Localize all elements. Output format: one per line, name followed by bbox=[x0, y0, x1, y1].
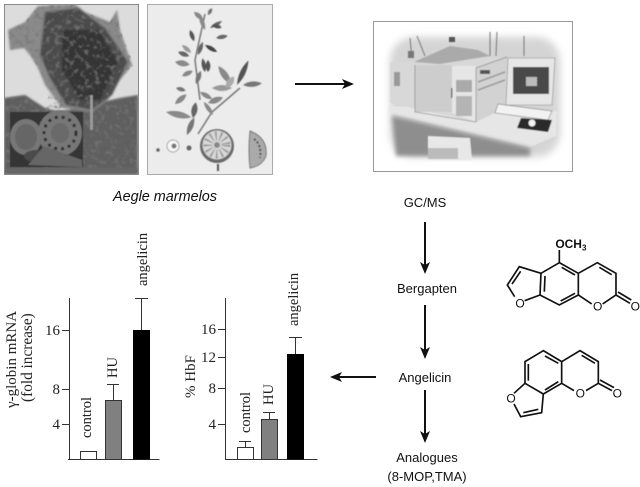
gear on top bbox=[414, 46, 490, 64]
arrow: Angelicin to Analogues bbox=[424, 390, 426, 441]
y tick labels: 8 bbox=[52, 382, 60, 398]
keyboard bbox=[495, 104, 552, 120]
bar chart: % HbF bbox=[183, 272, 318, 460]
printer bbox=[428, 136, 472, 160]
molecule: angelicin: O bbox=[613, 386, 622, 400]
caption: species name: Aegle marmelos bbox=[112, 189, 217, 205]
label: Angelicin: Angelicin bbox=[399, 370, 451, 385]
photo: GC/MS instrument bbox=[374, 22, 572, 172]
photo: Aegle marmelos tree with fruit inset bbox=[4, 4, 138, 174]
crown and undergrowth base bbox=[4, 4, 138, 174]
bar: HU bbox=[262, 420, 278, 460]
molecule: bergapten bbox=[507, 237, 640, 313]
molecule: bergapten: 3 bbox=[582, 244, 587, 253]
y tick labels: 4 bbox=[52, 417, 60, 433]
bar chart: gamma-globin mRNA bbox=[4, 232, 160, 460]
bar: HU bbox=[106, 400, 122, 460]
label: Bergapten: Bergapten bbox=[397, 281, 457, 296]
molecule: bergapten: O bbox=[631, 299, 640, 313]
bar: control bbox=[238, 448, 254, 460]
fruit cross-section bbox=[200, 129, 266, 171]
bar chart: gamma-globin mRNA: angelicin bbox=[135, 232, 151, 286]
instrument body bbox=[390, 62, 470, 120]
inset: cut fruit photo bbox=[10, 110, 83, 167]
illustration: botanical drawing of Aegle marmelos bbox=[148, 4, 272, 174]
label: GC/MS: GC/MS bbox=[404, 195, 447, 210]
y tick labels: 4 bbox=[208, 417, 216, 433]
y tick labels: 8 bbox=[208, 381, 216, 397]
monitor bbox=[506, 58, 555, 105]
y axis title: γ-globin mRNA bbox=[4, 311, 20, 409]
y tick labels: 16 bbox=[201, 322, 216, 338]
foliage texture bbox=[4, 4, 138, 174]
y tick labels: 12 bbox=[201, 350, 216, 366]
arrow: Angelicin to charts bbox=[332, 376, 376, 378]
bar labels: control bbox=[79, 397, 95, 438]
label: Analogues: (8-MOP,TMA) bbox=[387, 469, 467, 484]
molecule: bergapten: O bbox=[515, 296, 525, 310]
bar chart: % HbF: angelicin bbox=[286, 272, 302, 326]
bar chart: % HbF: HU bbox=[261, 384, 277, 405]
y tick labels: 16 bbox=[45, 323, 60, 339]
wires on wall bbox=[410, 32, 524, 58]
bar labels: control bbox=[238, 392, 254, 433]
y axis title: % HbF bbox=[183, 355, 199, 398]
table bbox=[389, 106, 557, 147]
molecule: angelicin: O bbox=[506, 392, 516, 406]
molecule: bergapten: O bbox=[593, 299, 602, 313]
arrow: Bergapten to Angelicin bbox=[424, 305, 426, 357]
y axis subtitle: (fold increase) bbox=[19, 313, 36, 402]
molecule: angelicin: O bbox=[576, 386, 585, 400]
label: Analogues: Analogues bbox=[396, 450, 458, 465]
molecule: bergapten: OCH bbox=[555, 237, 582, 251]
bar: angelicin bbox=[133, 330, 150, 460]
mouse pad bbox=[517, 118, 552, 132]
bar: angelicin bbox=[287, 354, 304, 460]
bar: control bbox=[80, 452, 96, 460]
molecule: angelicin bbox=[506, 351, 622, 417]
arrow: GC/MS to Bergapten bbox=[424, 222, 426, 272]
shadow under table bbox=[392, 116, 530, 156]
arrow: plant to instrument bbox=[295, 83, 352, 85]
trunk bbox=[90, 95, 93, 130]
bar chart: gamma-globin mRNA: HU bbox=[105, 357, 121, 378]
